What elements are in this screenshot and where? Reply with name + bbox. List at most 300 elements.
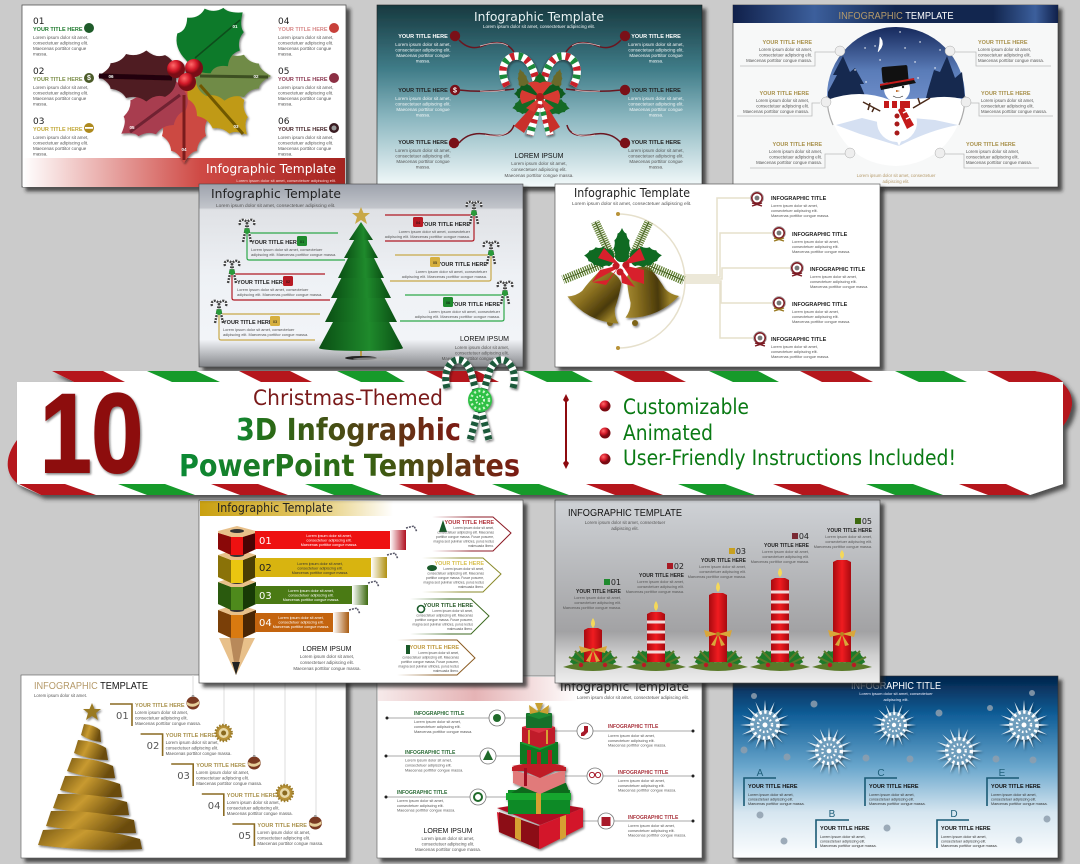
row left 2 — [384, 748, 496, 772]
item left 2: consectetuer adipiscing elit. — [395, 102, 451, 106]
item 04: Lorem ipsum dolor sit amet, consectetuer — [399, 229, 471, 234]
row right 2: Lorem ipsum dolor sit amet, — [618, 779, 665, 783]
item left 2: Maecenas porttitor congue — [396, 107, 450, 112]
label 03: Maecenas porttitor congue massa. — [688, 575, 746, 579]
text block: lorem ipsum: Lorem ipsum dolor sit amet, — [455, 345, 509, 350]
item 06: Maecenas porttitor congue — [278, 146, 332, 151]
ribbon 01: consectetuer adipiscing elit. — [306, 538, 352, 542]
chevron 2: porttitor congue massa. Fusce posuere, — [426, 576, 484, 580]
candle 5 — [812, 550, 872, 671]
left item 2: Maecenas porttitor congue massa. — [743, 109, 809, 114]
chevron 4: Lorem ipsum dolor sit amet, — [418, 651, 459, 655]
left item 3: Maecenas porttitor congue massa. — [756, 160, 822, 165]
row right 2: Maecenas porttitor congue massa. — [618, 788, 676, 792]
node 4: Maecenas porttitor congue massa. — [792, 320, 850, 324]
chevron 1: Lorem ipsum dolor sit amet, — [453, 526, 494, 530]
right item 3: consectetuer adipiscing elit. — [966, 154, 1019, 160]
item left 1: YOUR TITLE HERE — [398, 34, 448, 40]
item 01 — [240, 220, 345, 260]
node 3: Maecenas porttitor congue massa. — [810, 285, 868, 289]
item 01: YOUR TITLE HERE — [33, 27, 83, 33]
label 01: Lorem ipsum dolor sit amet, — [574, 596, 621, 600]
text block: lorem ipsum — [415, 828, 481, 852]
double arrow divider — [563, 394, 569, 469]
label 02: YOUR TITLE HERE — [639, 573, 685, 579]
item 03: consectetuer adipiscing elit. — [33, 140, 88, 146]
decorative dots — [740, 690, 1050, 844]
step 04: Lorem ipsum dolor sit amet, — [227, 800, 280, 805]
item D: consectetuer adipiscing elit. — [941, 840, 986, 844]
step 05: 05 — [238, 831, 251, 842]
item right 1: Lorem ipsum dolor sit amet, — [628, 42, 684, 47]
illustration: christmas tree — [319, 207, 403, 361]
chevron 1: malesuada libero. — [468, 544, 494, 548]
chevron 4: consectetuer adipiscing elit. Maecenas — [402, 656, 459, 660]
item 06: YOUR TITLE HERE — [450, 302, 500, 308]
ribbon 04: consectetuer adipiscing elit. — [278, 620, 324, 624]
text block: lorem ipsum: LOREM IPSUM — [460, 336, 509, 343]
row right 1 — [577, 723, 694, 748]
item 06 — [400, 282, 512, 321]
item 03 — [212, 301, 320, 340]
text block: lorem ipsum — [293, 646, 361, 671]
item left 3 — [395, 138, 459, 170]
item right 2: YOUR TITLE HERE — [631, 88, 681, 94]
item left 2: $ — [453, 88, 457, 94]
subtitle: candles panel — [585, 520, 666, 531]
label 02: 02 — [674, 562, 684, 571]
item 04: YOUR TITLE HERE — [278, 27, 328, 33]
item C: Lorem ipsum dolor sit amet, — [869, 793, 914, 797]
row left 2: Maecenas porttitor congue massa. — [405, 768, 463, 772]
item 03: Lorem ipsum dolor sit amet, consectetuer — [223, 327, 295, 332]
text block: lorem ipsum: Maecenas porttitor congue massa. — [442, 356, 509, 361]
item right 3 — [620, 138, 684, 170]
node 1: INFOGRAPHIC TITLE — [771, 196, 827, 202]
ribbon 02 — [255, 553, 398, 578]
step 01: Lorem ipsum dolor sit amet, — [135, 710, 188, 715]
label 01: YOUR TITLE HERE — [576, 589, 622, 595]
label 01: Maecenas porttitor congue massa. — [563, 606, 621, 610]
chevron 3: YOUR TITLE HERE — [423, 603, 473, 609]
illustration: golden bells with holly — [563, 222, 684, 329]
item 04: 04 — [278, 17, 290, 27]
panel: snowflake infographic — [733, 676, 1058, 858]
left item 3: YOUR TITLE HERE — [772, 142, 822, 148]
item 02 — [33, 67, 94, 106]
node 3: Lorem ipsum dolor sit amet, — [810, 275, 857, 279]
step 01 — [110, 695, 201, 726]
ribbon 04: Maecenas porttitor congue massa. — [273, 625, 329, 629]
item 06: massa. — [278, 152, 293, 156]
label 01: 01 — [611, 578, 621, 587]
illustration: candy canes with bow — [503, 56, 577, 135]
node 2 — [772, 226, 850, 254]
item A: A — [757, 768, 764, 779]
item E: consectetuer adipiscing elit. — [991, 798, 1036, 802]
panel: christmas tree infographic — [199, 184, 523, 367]
item C: C — [877, 768, 885, 779]
right item 2: consectetuer adipiscing elit. — [981, 104, 1034, 108]
item E: Maecenas porttitor congue massa. — [991, 802, 1048, 806]
item 05: YOUR TITLE HERE — [278, 77, 328, 83]
icon: crossed candy canes with green bow — [446, 360, 514, 440]
item E: Lorem ipsum dolor sit amet, — [991, 793, 1036, 797]
step 02 — [141, 725, 232, 756]
chevron 2 — [422, 558, 501, 592]
item C: consectetuer adipiscing elit. — [869, 798, 914, 802]
step 01: YOUR TITLE HERE — [135, 703, 185, 709]
item left 3: YOUR TITLE HERE — [398, 140, 448, 146]
chevron 1: consectetuer adipiscing elit. Maecenas — [437, 530, 494, 534]
step 04: YOUR TITLE HERE — [227, 793, 277, 799]
left item 2: YOUR TITLE HERE — [759, 91, 809, 97]
label 01 — [563, 578, 622, 610]
illustration: holly leaves and berries: 06 — [108, 74, 114, 79]
item right 3: Lorem ipsum dolor sit amet, — [628, 148, 684, 153]
item 03: 03 — [273, 319, 277, 324]
item 02: YOUR TITLE HERE — [33, 77, 83, 83]
subtitle: candy cane panel: Lorem ipsum dolor sit amet, consectetuer adipiscing elit. — [483, 24, 595, 29]
item E: E — [999, 768, 1006, 779]
item left 1: Lorem ipsum dolor sit amet, — [395, 42, 451, 47]
candle 4 — [750, 568, 810, 671]
panel: pencil infographic — [199, 500, 523, 683]
chevron 3: porttitor congue massa. Fusce posuere, — [415, 618, 473, 622]
item E — [987, 768, 1048, 806]
node 1: consectetuer adipiscing elit. — [771, 209, 818, 213]
ribbon 04 — [255, 608, 360, 633]
subtitle: holly panel: Lorem ipsum dolor sit amet, consectetuer adipiscing elit. — [236, 178, 336, 183]
step 02: Lorem ipsum dolor sit amet, — [166, 740, 219, 745]
chevron 1 — [432, 517, 511, 551]
bullet 1: Customizable — [623, 395, 749, 419]
item 05: 05 — [278, 67, 289, 77]
chevron 4: YOUR TITLE HERE — [409, 645, 459, 651]
item 01: massa. — [33, 52, 48, 56]
item 02: consectetuer adipiscing elit. — [33, 90, 88, 96]
chevron 2: YOUR TITLE HERE — [434, 561, 484, 567]
subtitle: snowflake panel: adipiscing elit. — [883, 697, 909, 702]
illustration: snowman in night scene — [827, 27, 965, 166]
banner: main headline strip — [8, 360, 1072, 496]
row left 1: Lorem ipsum dolor sit amet, — [414, 720, 461, 724]
chevron 3: malesuada libero. — [447, 627, 473, 631]
item right 2: Maecenas porttitor congue — [629, 107, 683, 112]
row right 3: Lorem ipsum dolor sit amet, — [628, 824, 675, 828]
chevron 1: porttitor congue massa. Fusce posuere, — [436, 535, 494, 539]
row right 3: Maecenas porttitor congue massa. — [628, 834, 686, 838]
chevron 3: consectetuer adipiscing elit. Maecenas — [416, 614, 473, 618]
text block: lorem ipsum: Maecenas porttitor congue massa. — [504, 173, 574, 178]
item D: D — [950, 809, 958, 820]
item B — [816, 809, 877, 848]
step 03: consectetuer adipiscing elit. — [196, 776, 249, 780]
step 02: consectetuer adipiscing elit. — [166, 746, 218, 750]
item 01: 01 — [300, 239, 304, 244]
item 04 — [385, 202, 481, 241]
label 03: YOUR TITLE HERE — [701, 558, 747, 564]
step 02: Maecenas porttitor congue massa. — [166, 751, 232, 756]
ornament strings — [193, 675, 316, 816]
item C: Maecenas porttitor congue massa. — [869, 802, 926, 806]
item D: YOUR TITLE HERE — [941, 826, 991, 832]
row left 2: Lorem ipsum dolor sit amet, — [405, 758, 452, 762]
item left 3: Maecenas porttitor congue — [396, 159, 450, 164]
row left 2: consectetuer adipiscing elit. — [405, 764, 452, 768]
text block: lorem ipsum: consectetuer adipiscing elit. — [300, 660, 354, 665]
right item 1: consectetuer adipiscing elit. — [978, 52, 1031, 58]
panel: holly leaf infographic — [22, 0, 346, 187]
item 06: Lorem ipsum dolor sit amet, — [278, 135, 334, 140]
item 02 — [225, 261, 330, 300]
item right 2: consectetuer adipiscing elit. — [628, 102, 684, 106]
item 05: consectetuer adipiscing elit. — [278, 90, 333, 96]
item 06: consectetuer adipiscing elit. — [278, 140, 333, 146]
right item 1 — [945, 40, 1051, 66]
heading line 2: 3D Infographic — [236, 413, 461, 448]
row right 3: INFOGRAPHIC TITLE — [628, 815, 679, 821]
label 02: Maecenas porttitor congue massa. — [626, 590, 684, 594]
item B: consectetuer adipiscing elit. — [820, 840, 865, 844]
label 02 — [626, 562, 685, 594]
chevron 4: malesuada libero. — [433, 669, 459, 673]
ribbon 03: Maecenas porttitor congue massa. — [283, 598, 339, 602]
node 4: consectetuer adipiscing elit. — [792, 315, 839, 319]
item A: Maecenas porttitor congue massa. — [748, 802, 805, 806]
item right 2: massa. — [649, 112, 663, 118]
label 04: Lorem ipsum dolor sit amet, — [762, 550, 809, 554]
node 3 — [790, 262, 868, 289]
item D: Lorem ipsum dolor sit amet, — [941, 835, 986, 839]
row right 1: INFOGRAPHIC TITLE — [608, 724, 659, 730]
label 04: consectetuer adipiscing elit. — [762, 555, 809, 559]
item 01: consectetuer adipiscing elit. — [33, 40, 88, 46]
label 03 — [688, 547, 747, 579]
item E: YOUR TITLE HERE — [991, 784, 1041, 790]
chevron 2: magna sed pulvinar ultricies, purus lectus — [424, 580, 484, 584]
node 2: Maecenas porttitor congue massa. — [792, 250, 850, 254]
item left 1: consectetuer adipiscing elit. — [395, 48, 451, 52]
item 04: adipiscing elit. Maecenas porttitor congue massa. — [385, 234, 470, 239]
step 04: 04 — [208, 801, 221, 812]
item 03: YOUR TITLE HERE — [33, 127, 83, 133]
item 02: YOUR TITLE HERE — [237, 280, 287, 286]
item right 1: consectetuer adipiscing elit. — [628, 48, 684, 52]
subtitle: gift stack: Lorem ipsum dolor sit amet, consectetuer adipiscing elit. — [577, 695, 689, 700]
item right 1: Maecenas porttitor congue — [629, 53, 683, 58]
item 04: YOUR TITLE HERE — [420, 222, 470, 228]
item 01: adipiscing elit. Maecenas porttitor congue massa. — [251, 252, 336, 257]
item 01 — [33, 17, 94, 56]
item left 3: Lorem ipsum dolor sit amet, — [395, 148, 451, 153]
label 04: Maecenas porttitor congue massa. — [751, 560, 809, 564]
item 05: 05 — [433, 260, 437, 265]
node 5: Lorem ipsum dolor sit amet, — [771, 345, 818, 349]
chevron 4: magna sed pulvinar ultricies, purus lectus — [399, 664, 459, 668]
left item 1: Maecenas porttitor congue massa. — [746, 58, 812, 63]
text block: lorem ipsum: Maecenas porttitor congue massa. — [415, 847, 481, 852]
node 1 — [750, 192, 829, 218]
item right 3: massa. — [649, 164, 663, 170]
text block: lorem ipsum — [504, 153, 574, 178]
node 4: INFOGRAPHIC TITLE — [792, 302, 848, 308]
item right 3: consectetuer adipiscing elit. — [628, 154, 684, 158]
item right 1 — [620, 31, 684, 64]
item 04: 04 — [416, 220, 421, 225]
item left 2: Lorem ipsum dolor sit amet, — [395, 96, 451, 101]
item A: YOUR TITLE HERE — [748, 784, 798, 790]
node 5: Maecenas porttitor congue massa. — [771, 355, 829, 359]
text block: lorem ipsum: Lorem ipsum dolor sit amet, — [421, 836, 475, 841]
item 05: YOUR TITLE HERE — [437, 262, 487, 268]
text block: lorem ipsum: LOREM IPSUM — [302, 646, 352, 653]
item 05: adipiscing elit. Maecenas porttitor congue massa. — [402, 274, 487, 279]
ribbon 03 — [255, 581, 379, 605]
item 04: Maecenas porttitor congue — [278, 46, 332, 51]
item 01: Lorem ipsum dolor sit amet, consectetuer — [251, 247, 323, 252]
left item 3 — [750, 142, 855, 168]
label 04: 04 — [799, 532, 809, 541]
ribbon 01: 01 — [259, 536, 272, 547]
left item 1: YOUR TITLE HERE — [762, 40, 812, 46]
item right 2: Lorem ipsum dolor sit amet, — [628, 96, 684, 101]
item B: Lorem ipsum dolor sit amet, — [820, 835, 866, 839]
item 04: consectetuer adipiscing elit. — [278, 40, 333, 46]
row right 2: consectetuer adipiscing elit. — [618, 784, 665, 788]
item left 2: massa. — [416, 112, 430, 118]
item 03: 03 — [33, 117, 44, 127]
step 02: 02 — [147, 741, 159, 752]
step 03 — [171, 755, 262, 786]
node 2: INFOGRAPHIC TITLE — [792, 232, 848, 238]
label 05: Lorem ipsum dolor sit amet, — [825, 535, 872, 539]
step 05: YOUR TITLE HERE — [257, 823, 307, 829]
row left 1: consectetuer adipiscing elit. — [414, 725, 461, 729]
row left 3: consectetuer adipiscing elit. — [397, 804, 444, 808]
left item 2: Lorem ipsum dolor sit amet, — [756, 98, 809, 103]
panel: snowman infographic — [733, 5, 1058, 187]
label 05: Maecenas porttitor congue massa. — [814, 545, 872, 549]
subtitle: ribbon tree: Lorem ipsum dolor sit amet. — [34, 693, 87, 698]
heading: snowflake title: INFOGRAPHIC TITLE — [851, 681, 941, 692]
item left 1: Maecenas porttitor congue — [396, 53, 450, 58]
heading: tree panel title: Infographic Template — [211, 187, 341, 201]
item 01: Maecenas porttitor congue — [33, 46, 87, 51]
right item 3: Maecenas porttitor congue massa. — [966, 160, 1032, 165]
item 03: YOUR TITLE HERE — [223, 320, 273, 326]
item 02: Lorem ipsum dolor sit amet, — [33, 85, 89, 90]
node 2: consectetuer adipiscing elit. — [792, 245, 839, 249]
item right 1: YOUR TITLE HERE — [631, 34, 681, 40]
bullet 3: User-Friendly Instructions Included! — [623, 446, 956, 470]
step 03: Maecenas porttitor congue massa. — [196, 781, 262, 786]
item 02: adipiscing elit. Maecenas porttitor congue massa. — [237, 292, 322, 297]
label 03: consectetuer adipiscing elit. — [699, 570, 746, 574]
left item 1: consectetuer adipiscing elit. — [759, 52, 812, 58]
heading line 1: Christmas-Themed — [253, 386, 443, 410]
heading: gift stack title: Infographic Template — [560, 680, 689, 694]
item 05 — [390, 242, 498, 281]
item 01: 01 — [33, 17, 44, 27]
node 5 — [754, 332, 829, 359]
item right 2 — [620, 85, 684, 118]
heading: pencil panel title: Infographic Template — [217, 501, 333, 515]
text block: lorem ipsum: Lorem ipsum dolor sit amet, — [511, 161, 567, 166]
chevron 2: malesuada libero. — [458, 585, 484, 589]
item left 3: massa. — [416, 164, 430, 170]
chevron 4 — [397, 640, 475, 675]
ribbon 02: Maecenas porttitor congue massa. — [292, 571, 348, 575]
ribbon 03: Lorem ipsum dolor sit amet, — [288, 589, 334, 593]
caption: snowman panel: Lorem ipsum dolor sit amet, consectetuer — [857, 173, 936, 178]
ribbon 02: Lorem ipsum dolor sit amet, — [297, 562, 343, 566]
right item 3 — [935, 142, 1039, 168]
right item 2: YOUR TITLE HERE — [981, 91, 1031, 97]
item 03: adipiscing elit. Maecenas porttitor congue massa. — [223, 332, 308, 337]
subtitle: snowflake panel — [859, 691, 933, 702]
item 06: Lorem ipsum dolor sit amet, consectetuer — [429, 309, 501, 314]
row right 1: consectetuer adipiscing elit. — [608, 739, 655, 743]
item D — [937, 809, 998, 848]
node 5: INFOGRAPHIC TITLE — [771, 337, 827, 343]
text block: lorem ipsum: Maecenas porttitor congue massa. — [293, 666, 361, 671]
right item 1: Maecenas porttitor congue massa. — [978, 58, 1044, 63]
row left 1: Maecenas porttitor congue massa. — [414, 730, 472, 734]
right item 2 — [961, 91, 1053, 116]
item left 3: consectetuer adipiscing elit. — [395, 154, 451, 158]
step 01: Maecenas porttitor congue massa. — [135, 721, 201, 726]
item 05: Lorem ipsum dolor sit amet, — [278, 85, 334, 90]
label 04: YOUR TITLE HERE — [764, 543, 810, 549]
right item 1: YOUR TITLE HERE — [978, 40, 1028, 46]
node 4 — [772, 296, 850, 324]
illustration: holly leaves and berries: 01 — [232, 24, 238, 29]
label 05: 05 — [862, 517, 872, 526]
left item 3: consectetuer adipiscing elit. — [769, 154, 822, 160]
text block: lorem ipsum: Lorem ipsum dolor sit amet, — [300, 654, 354, 659]
right item 2: Lorem ipsum dolor sit amet, — [981, 98, 1034, 103]
label 02: consectetuer adipiscing elit. — [637, 585, 684, 589]
heading: snowman panel title: INFOGRAPHIC TEMPLATE — [838, 11, 954, 22]
heading: candy cane panel title: Infographic Template — [474, 10, 604, 24]
candle 1 — [563, 618, 623, 671]
heading: holly panel title: Infographic Template — [206, 162, 336, 176]
step 01: consectetuer adipiscing elit. — [135, 716, 188, 720]
row right 2: INFOGRAPHIC TITLE — [618, 770, 669, 776]
text block: lorem ipsum: consectetuer adipiscing elit. — [422, 842, 474, 846]
label 01: consectetuer adipiscing elit. — [574, 601, 621, 605]
item 05: Maecenas porttitor congue — [278, 96, 332, 101]
item 05 — [278, 67, 339, 106]
item 02: 02 — [286, 279, 290, 284]
subtitle: candles panel: adipiscing elit. — [611, 526, 639, 531]
step 05: consectetuer adipiscing elit. — [257, 836, 310, 840]
illustration: stacked gift boxes — [497, 703, 583, 849]
item 06: 06 — [278, 117, 290, 127]
text block: lorem ipsum: LOREM IPSUM — [423, 828, 473, 835]
item 05: massa. — [278, 102, 293, 106]
ribbon 01 — [255, 526, 417, 550]
left item 3: Lorem ipsum dolor sit amet, — [769, 149, 822, 154]
row left 3: Maecenas porttitor congue massa. — [397, 808, 455, 812]
item 04: massa. — [278, 52, 293, 56]
illustration: snowflakes — [740, 700, 1049, 775]
item left 2 — [395, 85, 460, 118]
ribbon 01: Maecenas porttitor congue massa. — [301, 543, 357, 547]
row right 1: Lorem ipsum dolor sit amet, — [608, 734, 655, 738]
number 10: 10 — [40, 371, 143, 496]
